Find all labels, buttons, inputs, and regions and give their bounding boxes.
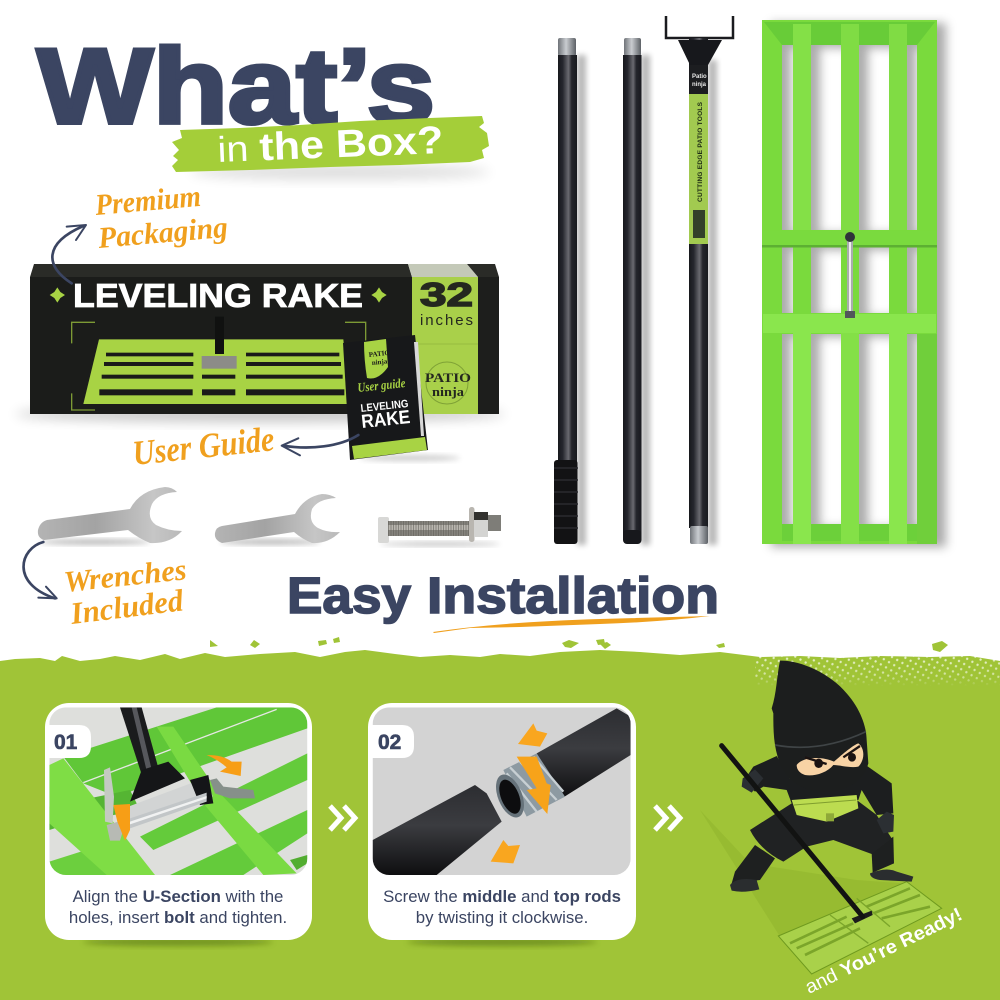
arrow: to Wrenches Included [24,542,57,598]
subtitle brush: in the Box? [172,116,490,180]
product box: Leveling Rake 32 inches: 32 [420,276,473,313]
rod: bottom section with grip [554,38,586,545]
wrench: small [215,494,340,544]
rod: top section with U bracket and label: ninja [692,82,707,88]
mini rake [778,882,942,974]
step card 01 [45,703,312,946]
rod: top section with U bracket and label: Patio [692,74,707,80]
callout: Premium Packaging [93,180,229,255]
ninja hips [750,800,892,862]
ninja mascot with rake [700,661,942,974]
bolt and nut [378,507,501,546]
step 02 caption: middle and top rods [462,887,621,906]
user guide booklet: LEVELING [360,398,409,415]
user guide booklet: RAKE [360,407,411,433]
product box: Leveling Rake 32 inches: inches [420,312,473,329]
product box: Leveling Rake 32 inches: ninja [432,384,465,399]
callout: Premium Packaging: Packaging [96,211,229,255]
subtitle brush: in the Box?: in the Box? [217,119,444,171]
product box: Leveling Rake 32 inches: PATIO [425,370,471,385]
user guide booklet: User guide [357,375,406,395]
product box: Leveling Rake 32 inches [15,264,505,422]
user guide booklet [343,335,460,461]
heading: Easy Installation [287,567,719,633]
wrench: large [38,487,182,544]
rake details [762,22,937,544]
callout: User Guide: User Guide [131,419,276,473]
step 02 photo [373,707,631,875]
callout: Wrenches Included: Included [68,582,185,631]
green background band [0,637,1000,1000]
step number badge 01 [49,725,91,758]
callout: Wrenches Included: Wrenches [62,553,188,599]
step number badge 01: 01 [54,731,78,754]
step 02 caption: Screw the [383,887,462,906]
user guide booklet: ninja [371,357,388,367]
step number badge 02 [372,725,414,758]
ninja torso and arms [743,756,893,815]
step 02 caption: by twisting it clockwise. [416,908,588,927]
chevrons 2 [655,806,680,830]
callout: Premium Packaging: Premium [93,180,202,222]
and You're Ready!: and You’re Ready! [802,904,966,998]
callout: Wrenches Included [62,553,188,631]
step number badge 02: 02 [378,731,401,754]
rod: top section with U bracket and label: CUTTING EDGE PATIO TOOLS [697,101,704,202]
step 01 photo [49,707,307,875]
step card 02 [368,703,636,946]
step 01 caption: bolt and tighten. [164,908,287,927]
rod: top section with U bracket and label [666,16,733,545]
rod: middle section [623,38,650,545]
step 01 caption: holes, insert [69,908,164,927]
user guide booklet: PATIO [368,349,391,359]
title: What's: What’s [37,26,435,146]
step 01 caption: U-Section with the [143,887,283,906]
heading: Easy Installation: Easy [287,567,412,624]
arrow: to Premium Packaging [52,225,86,283]
step 01 caption: Align the [73,887,143,906]
rake head [762,20,937,544]
ninja legs [732,845,775,883]
product box: Leveling Rake 32 inches: LEVELING RAKE [73,277,363,314]
heading: Easy Installation: Installation [427,567,719,624]
arrow: to User Guide [282,435,358,455]
chevrons 1 [330,806,355,830]
